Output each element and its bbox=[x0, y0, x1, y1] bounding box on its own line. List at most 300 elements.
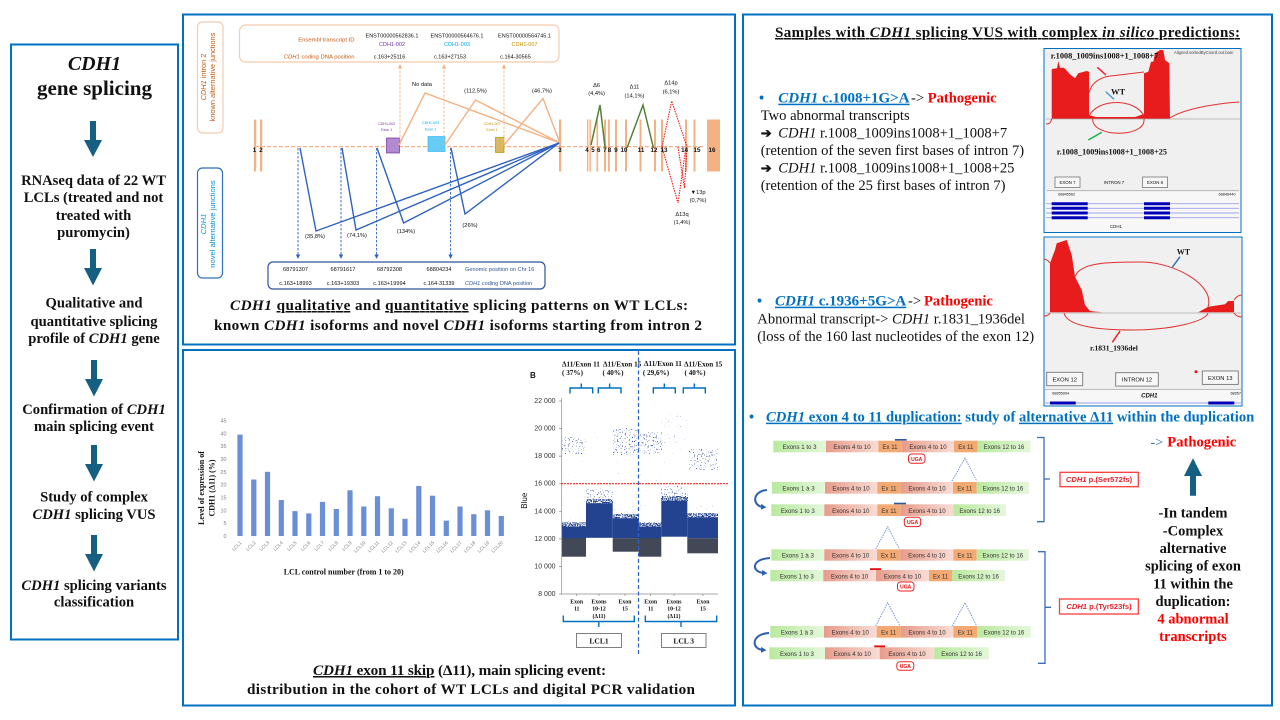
sashimi plot: exon 7-8: 68845562 bbox=[1058, 192, 1075, 196]
exon numbers: 10 bbox=[621, 147, 628, 154]
transcript row 2: Ex 11 bbox=[957, 486, 973, 492]
x labels: Exon bbox=[619, 600, 632, 606]
label: novel junctions: CDH1 bbox=[199, 214, 208, 234]
transcript row 6: Exons 4 to 10 bbox=[832, 629, 870, 636]
text: c.1936+5G>A: • bbox=[757, 294, 762, 310]
text: c.1936+5G>A: Abnormal transcript-> CDH1 r.1831_1936del bbox=[757, 311, 1025, 327]
sashimi plot: exon 7-8: CDH1 bbox=[1110, 224, 1123, 229]
label: known junctions: CDH1 intron 2 bbox=[199, 54, 208, 100]
transcript row 2: Exons 4 to 10 bbox=[908, 486, 946, 492]
transcript row 2: Ex 11 bbox=[881, 486, 897, 492]
green and red skip arcs bbox=[591, 101, 687, 203]
bar chart: delta 11 expression: LCL16 bbox=[435, 540, 450, 554]
dPCR ratio labels: Δ11/Exon 15 bbox=[603, 361, 642, 369]
dot plot: digital PCR: 12 000 bbox=[534, 536, 556, 543]
junction percentages: (46,7%) bbox=[532, 88, 552, 94]
dot plot: digital PCR: 16 000 bbox=[534, 481, 556, 488]
x labels: 11 bbox=[574, 606, 580, 612]
exon numbers: 6 bbox=[597, 147, 601, 154]
sashimi plot: exon 12-13: CDH1 bbox=[1141, 394, 1158, 400]
x labels: (Δ11) bbox=[668, 613, 681, 620]
transcript row 3: UGA bbox=[907, 520, 918, 526]
transcript row 4: Ex 11 bbox=[957, 553, 973, 560]
transcript table: c.163+25116 bbox=[374, 54, 405, 60]
bar chart: delta 11 expression: LCL15 bbox=[422, 540, 436, 554]
bar chart: delta 11 expression: 45 bbox=[220, 418, 226, 424]
text: tandem explanation bbox=[1145, 506, 1241, 645]
text: tandem explanation: duplication: bbox=[1156, 594, 1230, 610]
x labels: 10-12 bbox=[667, 606, 681, 612]
arrow 2 bbox=[84, 249, 102, 286]
transcript row 4: Exons 12 to 16 bbox=[982, 553, 1024, 560]
heading: duplication: • bbox=[749, 410, 754, 426]
dPCR ratio labels: ( 40%) bbox=[685, 369, 706, 377]
step: profile: quantitative splicing bbox=[31, 314, 158, 330]
junction percentages: Δ6 bbox=[593, 83, 600, 89]
x labels: 10-12 bbox=[592, 606, 606, 612]
dot plot: digital PCR: B bbox=[530, 371, 536, 380]
splice triangles 3 bbox=[876, 603, 977, 626]
bar chart: delta 11 expression: LCL11 bbox=[367, 540, 381, 554]
bar chart: delta 11 expression: LCL8 bbox=[327, 540, 340, 553]
bracket: Ser572fs bbox=[1037, 438, 1050, 522]
novel junction arcs bbox=[298, 143, 559, 258]
x labels: Exon bbox=[644, 600, 658, 606]
sashimi plot: exon 12-13: r.1831_1936del bbox=[1090, 343, 1138, 352]
text: c.1008+1G>A: Pathogenic bbox=[928, 91, 997, 107]
transcript row 6 bbox=[770, 626, 1031, 638]
x labels bbox=[570, 600, 710, 620]
transcript row 2 bbox=[772, 482, 1029, 494]
genomic position table bbox=[268, 262, 545, 289]
step: classification: CDH1 splicing variants bbox=[21, 578, 167, 594]
dot plot: digital PCR: Blue bbox=[520, 492, 529, 509]
text: c.1008+1G>A: -> bbox=[911, 91, 924, 107]
transcript row 5: Exons 12 to 16 bbox=[958, 573, 1000, 580]
sashimi plot: exon 7-8: INTRON 7 bbox=[1104, 180, 1125, 185]
step: confirmation bbox=[22, 402, 166, 435]
panel: complex VUS bbox=[743, 14, 1272, 706]
text: c.1936+5G>A bbox=[757, 294, 1034, 345]
transcript row 3: Exons 4 to 10 bbox=[908, 508, 946, 515]
dot plot: digital PCR: 20 000 bbox=[534, 426, 556, 433]
workflow title bbox=[37, 53, 152, 100]
transcript table: CDH1 coding DNA position bbox=[284, 54, 354, 60]
junction percentages: (112,5%) bbox=[464, 88, 487, 94]
caption: splicing patterns bbox=[214, 297, 702, 334]
transcript row 1: Ex 11 bbox=[882, 444, 898, 451]
transcript row 4 bbox=[771, 549, 1029, 561]
transcript tracks bbox=[1046, 204, 1239, 218]
exon numbers bbox=[253, 147, 716, 154]
transcript row 6: Exons 4 to 10 bbox=[908, 629, 946, 636]
splice triangle 2 bbox=[876, 527, 899, 549]
genomic position table: 68792308 bbox=[377, 267, 402, 273]
exon numbers: 8 bbox=[608, 147, 612, 154]
x labels: 15 bbox=[622, 606, 628, 612]
junction percentages: Δ14p bbox=[664, 80, 678, 86]
label: known junctions: known alternative junctions bbox=[208, 32, 217, 121]
dPCR ratio labels: ( 40%) bbox=[603, 369, 624, 377]
exon numbers: 3 bbox=[558, 147, 562, 154]
bar chart: delta 11 expression: LCL10 bbox=[353, 540, 367, 554]
transcript row 5: UGA bbox=[900, 585, 912, 591]
transcript row 5: Exons 4 to 10 bbox=[884, 573, 922, 580]
text: tandem explanation: -In tandem bbox=[1159, 506, 1227, 522]
verdict: pathogenic: Pathogenic bbox=[1167, 435, 1237, 451]
step: classification: classification bbox=[54, 594, 134, 610]
junction percentages: Δ11 bbox=[630, 85, 639, 91]
bar chart: delta 11 expression: LCL control number (from 1 to 20) bbox=[284, 568, 404, 576]
bar chart: delta 11 expression: 10 bbox=[220, 508, 226, 514]
step: profile bbox=[28, 296, 160, 347]
sashimi plot: exon 12-13 bbox=[1044, 237, 1242, 406]
transcript table: c.163+27153 bbox=[434, 54, 466, 60]
arrow up bbox=[1184, 458, 1202, 496]
protein label: Ser572fs bbox=[1060, 472, 1138, 487]
genomic position table: c.163+19303 bbox=[327, 281, 359, 287]
x labels: Exon bbox=[697, 600, 710, 606]
sashimi plot: exon 12-13: INTRON 12 bbox=[1122, 378, 1152, 384]
bottom brackets bbox=[563, 616, 717, 627]
protein label: Tyr523fs: CDH1 p.(Tyr523fs) bbox=[1066, 602, 1132, 611]
LCL boxes: LCL 3 bbox=[673, 636, 694, 646]
transcript row 4: Exons 4 to 10 bbox=[832, 553, 870, 560]
sashimi arrows bbox=[1112, 257, 1180, 342]
transcript row 3: Ex 11 bbox=[881, 508, 897, 515]
step: RNAseq: RNAseq data of 22 WT bbox=[21, 173, 166, 189]
protein label: Tyr523fs bbox=[1060, 599, 1138, 614]
bar chart: delta 11 expression: LCL1 bbox=[231, 540, 244, 553]
dPCR ratio labels: ( 37%) bbox=[562, 369, 584, 377]
bar chart: delta 11 expression: 5 bbox=[224, 521, 226, 527]
genomic position table: 68804234 bbox=[427, 267, 451, 273]
transcript table: ENST00000564745.1 bbox=[498, 34, 551, 40]
genomic position table: c.163+18993 bbox=[279, 281, 312, 287]
text: c.1936+5G>A: CDH1 c.1936+5G>A bbox=[775, 294, 906, 310]
transcript row 2: Exons 4 to 10 bbox=[832, 486, 870, 492]
transcript row 4: Ex 11 bbox=[881, 553, 897, 560]
arrow 4 bbox=[85, 445, 103, 482]
x labels: Exon bbox=[570, 600, 584, 606]
bar chart: delta 11 expression: 15 bbox=[220, 496, 226, 502]
exon numbers: 14 bbox=[681, 147, 689, 154]
label: novel junctions bbox=[198, 168, 222, 278]
sashimi plot: exon 7-8 bbox=[1044, 48, 1241, 232]
step: RNAseq: treated with bbox=[56, 208, 131, 224]
sashimi plot: exon 12-13: WT bbox=[1177, 247, 1191, 256]
genomic position table: 68791617 bbox=[331, 267, 355, 273]
step: confirmation: main splicing event bbox=[34, 419, 154, 435]
alternative exons bbox=[378, 121, 504, 153]
step: profile: Qualitative and bbox=[46, 296, 142, 312]
junction percentages: Δ13q bbox=[675, 212, 689, 218]
transcript row 1: Ex 11 bbox=[958, 444, 974, 451]
bar chart: delta 11 expression: LCL2 bbox=[245, 540, 258, 553]
exon numbers: 12 bbox=[651, 147, 658, 154]
curved arrow 3 bbox=[755, 633, 769, 650]
exon numbers: 7 bbox=[603, 147, 607, 154]
text: tandem explanation: transcripts bbox=[1159, 629, 1227, 645]
transcript row 3: Exons 12 to 16 bbox=[959, 508, 1001, 515]
transcript table: CDH1-007 bbox=[512, 42, 537, 48]
x labels: 11 bbox=[648, 606, 654, 612]
text: tandem explanation: -Complex bbox=[1163, 524, 1224, 540]
transcript table: CDH1-002 bbox=[379, 42, 405, 48]
transcript table: Ensembl transcript ID bbox=[298, 38, 354, 44]
text: c.1008+1G>A: ➔ bbox=[761, 125, 772, 140]
arrow 1 bbox=[84, 121, 102, 157]
exon numbers: 13 bbox=[661, 147, 668, 154]
sashimi plot: exon 7-8: r.1008_1009ins1008+1_1008+25 bbox=[1057, 147, 1167, 156]
step: VUS study bbox=[32, 490, 156, 523]
transcript row 6: Exons 1 à 3 bbox=[781, 629, 814, 636]
text: c.1008+1G>A: ➔ bbox=[761, 160, 772, 175]
bar chart: delta 11 expression: LCL4 bbox=[272, 540, 285, 553]
junction percentages: (14,1%) bbox=[625, 94, 645, 100]
step: RNAseq bbox=[21, 173, 166, 241]
curved arrow 2 bbox=[755, 558, 770, 573]
bar chart: delta 11 expression: 40 bbox=[220, 431, 226, 437]
transcript row 5: Exons 1 to 3 bbox=[780, 573, 814, 580]
transcript row 3: Exons 4 to 10 bbox=[832, 508, 870, 515]
alternative exons: Exon 1 bbox=[425, 128, 436, 132]
transcript row 6: Ex 11 bbox=[958, 629, 973, 636]
alternative exons: CDH1-003 bbox=[422, 121, 439, 125]
junction percentages: ▼13p bbox=[690, 190, 706, 196]
bar chart: delta 11 expression: LCL20 bbox=[490, 540, 505, 554]
transcript row 1: UGA bbox=[911, 457, 923, 463]
bar chart: delta 11 expression: 30 bbox=[220, 457, 226, 463]
bar chart: delta 11 expression: 35 bbox=[220, 444, 226, 450]
transcript row 3 bbox=[771, 503, 1006, 527]
junction percentages: (26%) bbox=[462, 223, 478, 229]
dot plot: digital PCR: 10 000 bbox=[534, 563, 556, 570]
junction percentages: (4,4%) bbox=[588, 91, 605, 97]
bar chart: delta 11 expression: LCL18 bbox=[463, 540, 477, 554]
workflow title: gene splicing bbox=[37, 76, 152, 100]
gene diagram bbox=[253, 65, 720, 258]
step: profile: profile of CDH1 gene bbox=[28, 331, 160, 347]
transcript row 5: Exons 4 to 10 bbox=[831, 573, 869, 580]
panel: workflow bbox=[11, 44, 178, 640]
genomic position table: c.163+19994 bbox=[373, 281, 406, 287]
text: c.1008+1G>A: CDH1 c.1008+1G>A bbox=[778, 91, 910, 107]
bracket: Tyr523fs bbox=[1038, 552, 1051, 663]
sashimi plot: exon 7-8: r.1008_1009ins1008+1_1008+7 bbox=[1051, 51, 1158, 60]
x labels: 15 bbox=[700, 606, 706, 612]
top brackets bbox=[570, 384, 705, 394]
text: c.1008+1G>A: (retention of the seven first bases of intron 7) bbox=[761, 143, 1024, 159]
step: VUS study: CDH1 splicing VUS bbox=[32, 507, 156, 523]
exon numbers: 15 bbox=[694, 147, 701, 154]
transcript row 1: Exons 4 to 10 bbox=[909, 444, 947, 451]
alternative exons: CDH1-002 bbox=[378, 122, 395, 126]
text: tandem explanation: 4 abnormal bbox=[1157, 611, 1229, 627]
transcript table: ENST00000562836.1 bbox=[366, 34, 418, 40]
step: RNAseq: LCLs (treated and not bbox=[24, 190, 163, 206]
transcript row 7: Exons 12 to 16 bbox=[941, 651, 983, 658]
transcript row 3: Exons 1 to 3 bbox=[781, 508, 815, 515]
genomic position table: 68791307 bbox=[283, 267, 308, 273]
step: classification bbox=[21, 578, 167, 610]
text: tandem explanation: 11 within the bbox=[1153, 576, 1233, 592]
bar chart: delta 11 expression: LCL12 bbox=[380, 540, 395, 554]
transcript row 6: Exons 12 to 16 bbox=[984, 629, 1025, 636]
bar chart: delta 11 expression: LCL5 bbox=[286, 540, 299, 553]
arrow 3 bbox=[85, 360, 103, 396]
sashimi plot: exon 7-8: 68846440 bbox=[1219, 192, 1235, 196]
transcript table: CDH1-003 bbox=[444, 42, 470, 48]
text: tandem explanation: alternative bbox=[1160, 541, 1227, 557]
exon numbers: 4 bbox=[585, 147, 589, 154]
dPCR ratio labels: Δ11/Exon 11 bbox=[644, 360, 682, 368]
exon numbers: 9 bbox=[614, 147, 618, 154]
transcript row 7 bbox=[769, 645, 989, 670]
text: c.1008+1G>A: CDH1 r.1008_1009ins1008+1_1008+25 bbox=[778, 160, 1014, 176]
exon numbers: 2 bbox=[259, 147, 263, 154]
transcript row 5: Ex 11 bbox=[933, 573, 949, 580]
bar chart: delta 11 expression: 0 bbox=[224, 534, 226, 540]
junction percentages: (6,1%) bbox=[663, 90, 679, 96]
text: c.1008+1G>A: (retention of the 25 first bases of intron 7) bbox=[761, 178, 1006, 194]
dot plot: digital PCR: 18 000 bbox=[534, 453, 556, 460]
junction percentages: (1,4%) bbox=[674, 220, 690, 226]
transcript row 1: Exons 4 to 10 bbox=[833, 444, 871, 451]
x labels: Exons bbox=[591, 600, 607, 606]
y axis title: CDH1 (Δ11) (%) bbox=[208, 459, 216, 517]
dot plot: digital PCR: 22 000 bbox=[534, 398, 556, 405]
panel: splicing patterns bbox=[183, 14, 735, 344]
text: c.1008+1G>A: • bbox=[759, 90, 764, 106]
caption: splicing patterns: CDH1 qualitative and quantitative splicing patterns on WT LCLs: bbox=[230, 297, 688, 314]
transcript row 2: Exons 12 to 16 bbox=[983, 486, 1024, 492]
transcript table: c.164-30565 bbox=[500, 54, 531, 60]
label: novel junctions: novel alternative junctions bbox=[208, 180, 217, 268]
transcript row 2: Exons 1 à 3 bbox=[782, 486, 815, 492]
step: VUS study: Study of complex bbox=[40, 490, 149, 506]
bar chart: delta 11 expression: LCL9 bbox=[341, 540, 354, 553]
dPCR ratio labels: Δ11/Exon 15 bbox=[684, 361, 723, 369]
x labels: (Δ11) bbox=[593, 613, 606, 620]
genomic position table: CDH1 coding DNA position bbox=[465, 281, 532, 287]
text: c.1936+5G>A: (loss of the 160 last nucleotides of the exon 12) bbox=[757, 329, 1034, 345]
transcript row 5 bbox=[770, 568, 1005, 591]
transcript table bbox=[240, 25, 559, 62]
caption: splicing patterns: known CDH1 isoforms and novel CDH1 isoforms starting from intron 2 bbox=[214, 317, 702, 334]
exon numbers: 5 bbox=[591, 147, 595, 154]
exon numbers: 1 bbox=[253, 147, 257, 154]
sashimi plot: exon 12-13: EXON 13 bbox=[1208, 376, 1233, 382]
bar chart: delta 11 expression: LCL14 bbox=[408, 540, 422, 554]
step: confirmation: Confirmation of CDH1 bbox=[22, 402, 166, 418]
genomic position table: c.164-31339 bbox=[423, 281, 455, 287]
sashimi plot: exon 7-8: WT bbox=[1111, 86, 1126, 96]
transcript row 1 bbox=[773, 439, 1031, 463]
verdict: pathogenic: -> bbox=[1150, 436, 1163, 451]
arrow 5 bbox=[85, 535, 103, 572]
LCL boxes bbox=[576, 634, 706, 648]
bar chart: delta 11 expression: LCL19 bbox=[477, 540, 491, 554]
transcript row 7: Exons 1 to 3 bbox=[780, 651, 815, 658]
bar chart: delta 11 expression bbox=[197, 418, 505, 576]
transcript row 7: UGA bbox=[900, 664, 911, 670]
caption: exon 11 skip: distribution in the cohort of WT LCLs and digital PCR validation bbox=[247, 681, 696, 698]
dot plot: digital PCR: 14 000 bbox=[534, 508, 556, 515]
transcript row 7: Exons 4 to 10 bbox=[888, 651, 926, 658]
protein label: Ser572fs: CDH1 p.(Ser572fs) bbox=[1066, 475, 1133, 484]
alternative exons: Exon 1 bbox=[381, 128, 392, 132]
heading: Samples with CDH1 splicing VUS with complex in silico predictions: bbox=[775, 25, 1240, 41]
caption: exon 11 skip: CDH1 exon 11 skip (Δ11), main splicing event: bbox=[313, 662, 606, 679]
transcript row 4: Exons 4 to 10 bbox=[908, 553, 946, 560]
text: c.1936+5G>A: Pathogenic bbox=[924, 294, 993, 310]
sashimi plot: exon 12-13: 68855994 bbox=[1052, 392, 1069, 396]
junction percentages: (35,8%) bbox=[305, 234, 325, 240]
transcript row 7: Exons 4 to 10 bbox=[834, 651, 872, 658]
transcript table: ENST00000564676.1 bbox=[431, 34, 483, 40]
sashimi plot: exon 12-13: 68857 bbox=[1230, 392, 1241, 396]
x labels: Exons bbox=[666, 600, 682, 606]
dPCR ratio labels: ( 29,6%) bbox=[643, 369, 670, 377]
junction percentages: (74,1%) bbox=[347, 233, 367, 239]
text: c.1008+1G>A: Two abnormal transcripts bbox=[761, 108, 910, 124]
y axis title bbox=[197, 451, 216, 525]
panel: exon 11 skip bbox=[183, 350, 735, 706]
transcript row 6: Ex 11 bbox=[881, 629, 897, 636]
junction percentages: (0,7%) bbox=[690, 198, 706, 204]
scatter clusters bbox=[562, 414, 718, 566]
bar chart: delta 11 expression: LCL3 bbox=[259, 540, 271, 553]
junction percentages: No data bbox=[412, 82, 433, 88]
genomic position table: Genomic position on Chr 16 bbox=[465, 267, 534, 273]
sashimi arrows bbox=[1088, 67, 1114, 140]
transcript row 1: Exons 12 to 16 bbox=[984, 444, 1025, 451]
workflow title: CDH1 bbox=[68, 53, 121, 75]
text: c.1008+1G>A bbox=[759, 90, 1024, 194]
known junction arcs bbox=[399, 65, 560, 145]
bar chart: delta 11 expression: 25 bbox=[220, 470, 226, 476]
caption: exon 11 skip bbox=[247, 662, 696, 698]
bar chart: delta 11 expression: 20 bbox=[220, 483, 226, 489]
step: RNAseq: puromycin) bbox=[57, 225, 130, 241]
text: c.1008+1G>A: CDH1 r.1008_1009ins1008+1_1008+7 bbox=[778, 125, 1007, 141]
label: known junctions bbox=[198, 22, 223, 133]
bar chart: delta 11 expression: LCL6 bbox=[300, 540, 312, 553]
exon numbers: 11 bbox=[638, 147, 645, 154]
curved arrow 1 bbox=[755, 490, 767, 507]
bar chart: delta 11 expression: LCL13 bbox=[394, 540, 409, 554]
dot plot: digital PCR: 8 000 bbox=[538, 591, 556, 598]
bar chart: delta 11 expression: LCL17 bbox=[449, 540, 464, 554]
transcript track bbox=[1045, 402, 1241, 404]
transcript row 4: Exons 1 à 3 bbox=[782, 553, 814, 560]
heading: duplication: CDH1 exon 4 to 11 duplication: study of alternative Δ11 within the duplication bbox=[766, 410, 1254, 426]
sashimi plot: exon 7-8: EXON 7 bbox=[1059, 180, 1076, 185]
y axis title: Level of expression of bbox=[197, 451, 206, 525]
transcript row 1: Exons 1 to 3 bbox=[783, 444, 817, 451]
bar chart: delta 11 expression: LCL7 bbox=[314, 540, 326, 553]
dPCR ratio labels bbox=[562, 360, 723, 377]
splice triangle 1 bbox=[952, 458, 977, 481]
axes bbox=[559, 398, 718, 596]
sashimi plot: exon 12-13: EXON 12 bbox=[1052, 377, 1077, 383]
negative and positive droplet blocks bbox=[562, 501, 718, 557]
alternative exons: CDH1-007 bbox=[484, 122, 500, 126]
text: tandem explanation: splicing of exon bbox=[1145, 559, 1241, 575]
dot plot: digital PCR bbox=[520, 351, 728, 655]
text: c.1936+5G>A: -> bbox=[908, 294, 921, 310]
